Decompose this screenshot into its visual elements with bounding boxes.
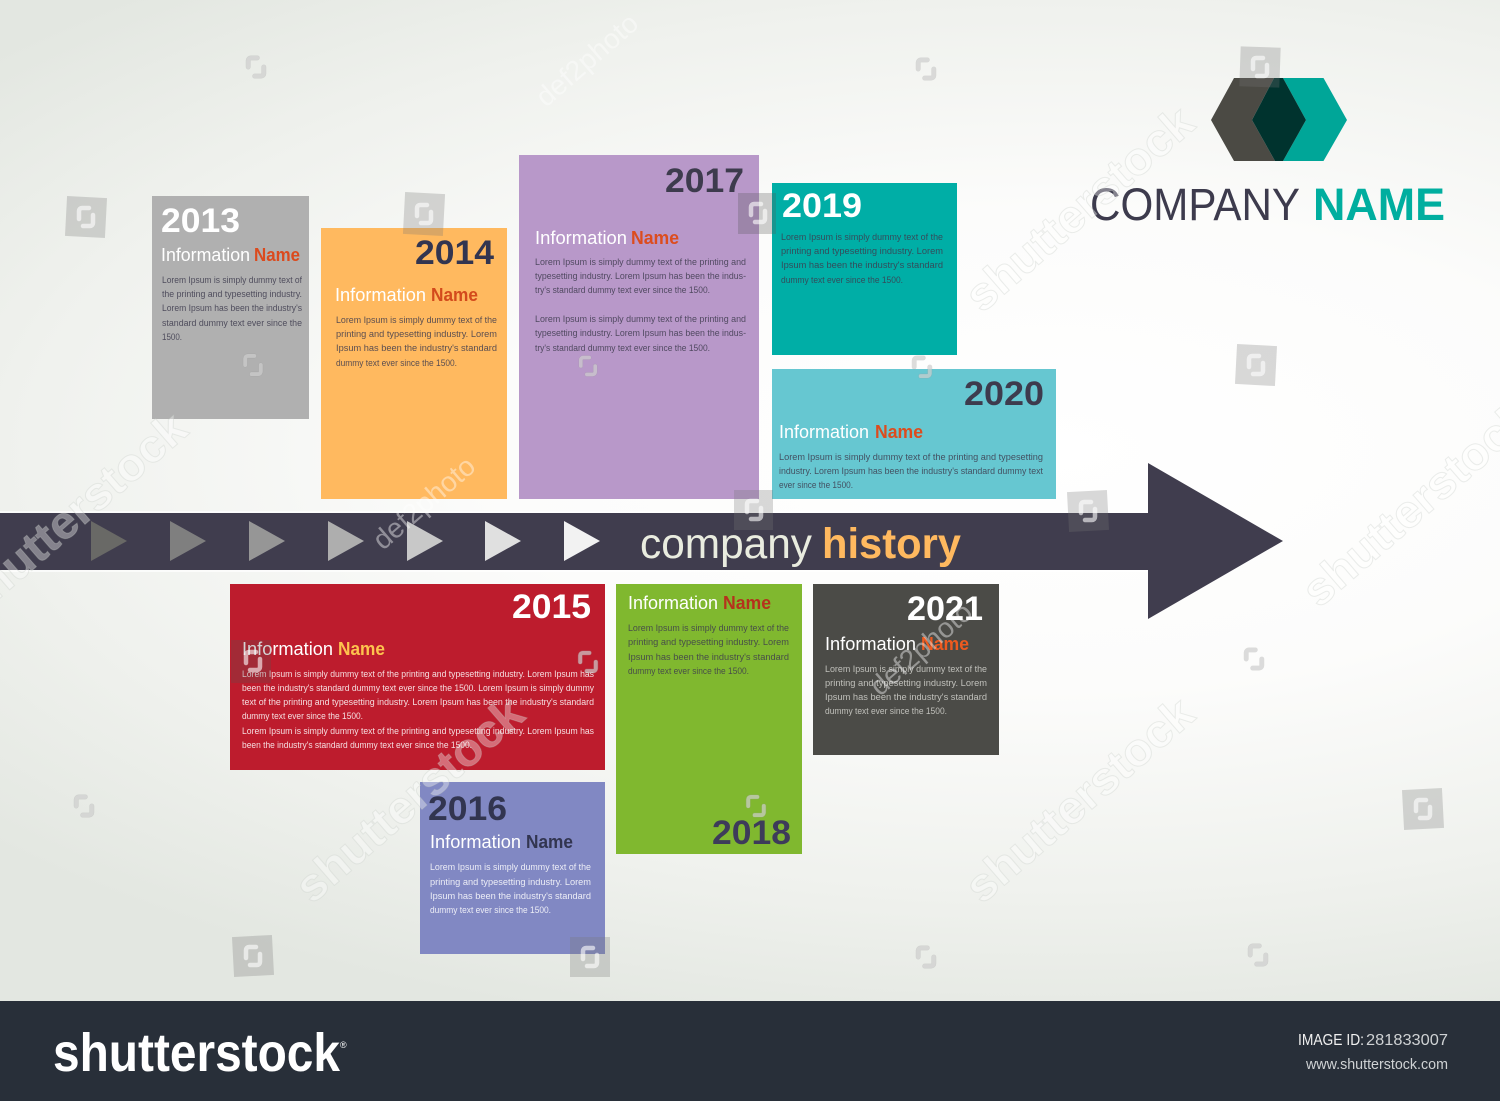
year 2015: 2015 <box>512 588 591 626</box>
body text 2017 <box>535 257 746 353</box>
body text 2017: typesetting industry. Lorem Ipsum has been the indus- <box>535 271 746 281</box>
body text 2014: Lorem Ipsum is simply dummy text of the <box>336 315 497 325</box>
heading 2020 <box>779 422 923 442</box>
body text 2013: Lorem Ipsum has been the industry's <box>162 303 303 313</box>
panel: 2015 <box>230 584 605 770</box>
body text 2016: dummy text ever since the 1500. <box>430 905 551 915</box>
body text 2015: been the industry's standard dummy text ever since the 1500. Lorem Ipsum is simply dummy <box>242 683 595 693</box>
heading 2015: Information <box>242 639 333 659</box>
heading 2018: Name <box>723 593 771 613</box>
body text 2018: Ipsum has been the industry's standard <box>628 652 789 662</box>
body text 2020: ever since the 1500. <box>779 480 853 490</box>
body text 2019 <box>781 232 943 285</box>
body text 2021: Ipsum has been the industry's standard <box>825 692 987 702</box>
heading 2013 <box>161 245 300 265</box>
year 2019: 2019 <box>782 187 862 225</box>
panel: 2018 <box>616 584 802 854</box>
heading 2016 <box>430 832 573 852</box>
body text 2019: Ipsum has been the industry's standard <box>781 260 943 270</box>
body text 2015: text of the printing and typesetting industry. Lorem Ipsum has been the industry's standard <box>242 697 594 707</box>
heading 2018 <box>628 593 771 613</box>
body text 2014: printing and typesetting industry. Lorem <box>336 329 497 339</box>
body text 2013: standard dummy text ever since the <box>162 318 302 328</box>
year 2013: 2013 <box>161 202 240 240</box>
body text 2016: Lorem Ipsum is simply dummy text of the <box>430 862 591 872</box>
body text 2017: Lorem Ipsum is simply dummy text of the printing and <box>535 257 746 267</box>
heading 2020: Information <box>779 422 869 442</box>
year 2018: 2018 <box>712 814 791 852</box>
body text 2018: printing and typesetting industry. Lorem <box>628 637 789 647</box>
heading 2016: Information <box>430 832 521 852</box>
watermark overlay: shutterstock <box>284 686 534 913</box>
heading 2017: Name <box>631 228 679 248</box>
heading 2014: Information <box>335 285 426 305</box>
footer bar <box>0 1001 1500 1101</box>
arrow label: history <box>822 520 961 568</box>
image id: IMAGE ID: <box>1298 1032 1364 1049</box>
company name: NAME <box>1313 179 1445 230</box>
panel: 2013 <box>152 196 309 419</box>
year 2021: 2021 <box>907 590 983 628</box>
panel: 2021 <box>813 584 999 755</box>
year 2014: 2014 <box>415 234 494 272</box>
body text 2019: Lorem Ipsum is simply dummy text of the <box>781 232 943 242</box>
company logo <box>1090 78 1445 230</box>
watermark overlay: def2photo <box>367 450 481 556</box>
body text 2019: dummy text ever since the 1500. <box>781 275 903 285</box>
body text 2021: printing and typesetting industry. Lorem <box>825 678 987 688</box>
body text 2021: dummy text ever since the 1500. <box>825 706 947 716</box>
body text 2020: Lorem Ipsum is simply dummy text of the printing and typesetting <box>779 452 1043 462</box>
panel: 2016 <box>420 782 605 954</box>
heading 2015 <box>242 639 385 659</box>
body text 2016: Ipsum has been the industry's standard <box>430 891 591 901</box>
heading 2013: Name <box>254 245 300 265</box>
heading 2014 <box>335 285 478 305</box>
panel: 2020 <box>772 369 1056 499</box>
watermark overlay: def2photo <box>530 7 644 113</box>
body text 2015: dummy text ever since the 1500. <box>242 711 363 721</box>
arrow: company history timeline <box>0 463 1283 619</box>
body text 2013: the printing and typesetting industry. <box>162 289 302 299</box>
body text 2017: typesetting industry. Lorem Ipsum has been the indus- <box>535 328 746 338</box>
heading 2021 <box>825 634 969 654</box>
body text 2016 <box>430 862 591 915</box>
body text 2017: try's standard dummy text ever since the 1500. <box>535 343 710 353</box>
body text 2018: Lorem Ipsum is simply dummy text of the <box>628 623 789 633</box>
body text 2019: printing and typesetting industry. Lorem <box>781 246 943 256</box>
body text 2017: Lorem Ipsum is simply dummy text of the printing and <box>535 314 746 324</box>
body text 2015: Lorem Ipsum is simply dummy text of the printing and typesetting industry. Lorem Ipsum has <box>242 669 595 679</box>
timeline markers <box>91 521 600 561</box>
heading 2018: Information <box>628 593 718 613</box>
body text 2021 <box>825 664 987 716</box>
heading 2014: Name <box>431 285 478 305</box>
image id <box>1298 1032 1448 1049</box>
image id: 281833007 <box>1366 1032 1448 1049</box>
body text 2018: dummy text ever since the 1500. <box>628 666 749 676</box>
body text 2014 <box>336 315 497 368</box>
body text 2013: Lorem Ipsum is simply dummy text of <box>162 275 303 285</box>
year 2016: 2016 <box>428 790 507 828</box>
body text 2020 <box>779 452 1044 490</box>
body text 2018 <box>628 623 789 676</box>
icon: hexagon mark <box>1211 78 1347 161</box>
heading 2017: Information <box>535 228 627 248</box>
arrow label: company <box>640 520 812 568</box>
arrow label <box>640 520 961 568</box>
panel: 2017 <box>519 155 759 499</box>
body text 2017: try's standard dummy text ever since the 1500. <box>535 285 710 295</box>
heading 2015: Name <box>338 639 385 659</box>
watermark overlay: shutterstock <box>954 95 1204 322</box>
panel: 2014 <box>321 228 507 499</box>
heading 2020: Name <box>875 422 923 442</box>
heading 2017 <box>535 228 679 248</box>
heading 2016: Name <box>526 832 573 852</box>
watermark overlay: shutterstock <box>954 686 1204 913</box>
heading 2013: Information <box>161 245 250 265</box>
year 2017: 2017 <box>665 162 744 200</box>
year 2020: 2020 <box>964 375 1044 413</box>
body text 2014: dummy text ever since the 1500. <box>336 358 457 368</box>
footer logo: shutterstock <box>53 1023 341 1083</box>
body text 2021: Lorem Ipsum is simply dummy text of the <box>825 664 987 674</box>
body text 2013 <box>162 275 303 342</box>
website url: www.shutterstock.com <box>1305 1056 1448 1073</box>
panel: 2019 <box>772 183 957 355</box>
body text 2020: industry. Lorem Ipsum has been the industry's standard dummy text <box>779 466 1044 476</box>
watermark overlay: def2photo <box>864 596 978 702</box>
body text 2015 <box>242 669 595 750</box>
heading 2021: Information <box>825 634 916 654</box>
footer registered mark: ® <box>340 1040 347 1050</box>
body text 2014: Ipsum has been the industry's standard <box>336 343 497 353</box>
company name: COMPANY <box>1090 179 1300 230</box>
body text 2016: printing and typesetting industry. Lorem <box>430 877 591 887</box>
body text 2013: 1500. <box>162 332 182 342</box>
company name <box>1090 179 1445 230</box>
heading 2021: Name <box>921 634 969 654</box>
body text 2015: been the industry's standard dummy text ever since the 1500. <box>242 740 472 750</box>
body text 2015: Lorem Ipsum is simply dummy text of the printing and typesetting industry. Lorem Ipsum has <box>242 726 595 736</box>
